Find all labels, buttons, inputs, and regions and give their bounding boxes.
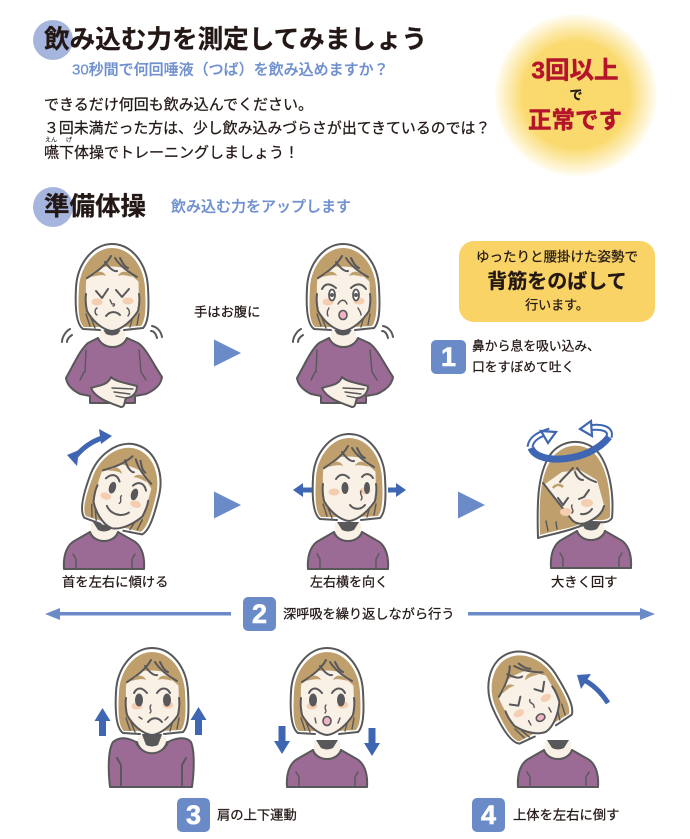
- step 3 text: 肩の上下運動: [217, 808, 297, 822]
- section subtitle: 飲み込む力をアップします: [171, 198, 351, 216]
- section heading accent circle: [33, 187, 73, 227]
- intro text: できるだけ何回も飲み込んでください。: [44, 96, 313, 114]
- step 1 text: [472, 338, 600, 374]
- step 2 text: 深呼吸を繰り返しながら行う: [283, 606, 454, 622]
- icon: curved double arrow: [67, 429, 112, 466]
- arrow: left span: [45, 608, 231, 620]
- callout: normal is 3 or more: 3回以上: [531, 56, 619, 84]
- arrow: turn to roll: [458, 492, 485, 518]
- step 3 badge: [177, 798, 210, 832]
- callout: relaxed posture: 行います。: [525, 298, 589, 312]
- step 4 badge: [472, 798, 505, 832]
- figure: shoulders up: [94, 648, 206, 787]
- arrow: right span: [468, 608, 655, 620]
- subtitle: 30秒間で何回唾液（つば）を飲み込めますか？: [72, 62, 389, 78]
- title: 飲み込む力を測定してみましょう: [44, 25, 427, 54]
- intro text: [44, 96, 490, 162]
- icon: up arrows: [94, 708, 110, 736]
- step 4 badge: 4: [481, 800, 496, 830]
- step 1 text: 鼻から息を吸い込み、: [472, 338, 600, 354]
- figure: roll head: [530, 421, 631, 568]
- icon: right arrow: [388, 483, 406, 497]
- intro text: げ: [66, 136, 72, 144]
- intro text: えん: [45, 137, 57, 144]
- icon: left arrow: [293, 483, 312, 497]
- callout: normal is 3 or more: 正常です: [528, 107, 622, 133]
- label: tilt head: 首を左右に傾ける: [62, 574, 168, 590]
- icon: down arrows: [274, 726, 290, 754]
- intro text: 嚥下体操でトレーニングしましょう！: [44, 144, 299, 162]
- step 2 badge: [243, 597, 276, 631]
- icon: rotation arrows: [530, 421, 609, 459]
- title accent circle: [33, 20, 73, 60]
- callout: normal is 3 or more: で: [569, 88, 583, 102]
- figure: lean sideways: [473, 638, 608, 787]
- arrow: step 1: [214, 340, 241, 366]
- callout: normal is 3 or more: [495, 14, 657, 176]
- arrow: tilt to turn: [214, 492, 241, 518]
- label: turn head: 左右横を向く: [310, 574, 388, 590]
- callout: relaxed posture: [459, 241, 655, 322]
- step 1 badge: [431, 340, 466, 374]
- icon: curved arrow: [577, 674, 608, 703]
- step 1 badge: 1: [441, 342, 456, 372]
- label: hands on belly: 手はお腹に: [194, 304, 260, 320]
- figure: shoulders down: [274, 648, 380, 787]
- callout: relaxed posture: 背筋をのばして: [487, 270, 627, 293]
- step 1 text: 口をすぼめて吐く: [472, 360, 574, 374]
- figure: exhale eyes closed: [62, 244, 162, 407]
- step 3 badge: 3: [186, 800, 201, 830]
- callout: relaxed posture: ゆったりと腰掛けた姿勢で: [476, 250, 638, 264]
- label: roll head: 大きく回す: [551, 574, 617, 590]
- step 4 text: 上体を左右に倒す: [513, 808, 619, 822]
- step 2 badge: 2: [252, 599, 267, 629]
- figure: tilt head: [64, 429, 172, 569]
- figure: turn head: [293, 434, 406, 569]
- section heading: 準備体操: [44, 193, 146, 221]
- intro text: ３回未満だった方は、少し飲み込みづらさが出てきているのでは？: [44, 120, 490, 137]
- figure: inhale eyes open: [293, 244, 393, 407]
